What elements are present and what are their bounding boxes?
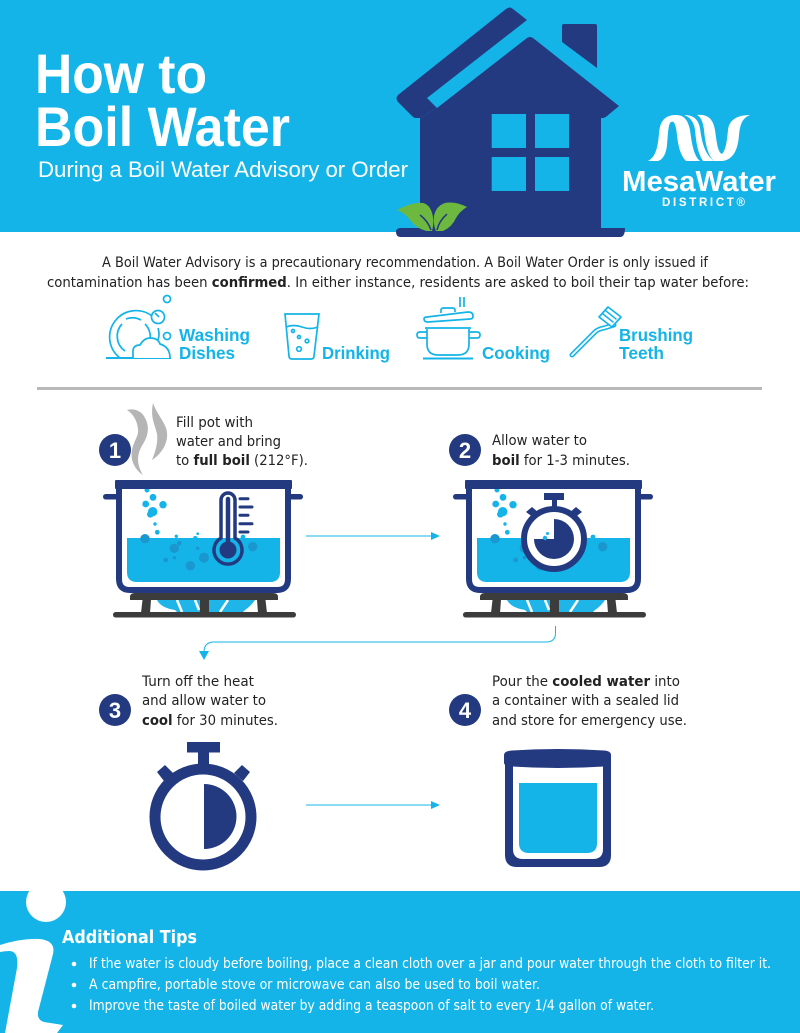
icon: cooking pot bbox=[417, 297, 480, 358]
icon: pot on burner with thermometer bbox=[103, 480, 303, 618]
icon: glass of water bbox=[285, 314, 319, 359]
cooking: Cooking bbox=[482, 343, 550, 363]
logo: Mesa Water District: MesaWater bbox=[622, 166, 776, 198]
logo: Mesa Water District bbox=[622, 115, 776, 209]
step 1 text: water and bring bbox=[176, 434, 281, 450]
step number 4 bbox=[449, 694, 481, 726]
step 3 text: and allow water to bbox=[142, 693, 266, 709]
icon: pot on burner with stopwatch bbox=[453, 480, 653, 618]
arrow: step 3 to 4 bbox=[306, 801, 440, 809]
tips list: A campfire, portable stove or microwave can also be used to boil water. bbox=[89, 977, 540, 993]
intro paragraph bbox=[47, 255, 749, 291]
icon: stopwatch bbox=[524, 493, 584, 569]
step number 1 bbox=[99, 434, 131, 466]
washing dishes bbox=[106, 296, 250, 363]
step 1 text bbox=[176, 415, 308, 469]
drinking: Drinking bbox=[322, 343, 390, 363]
step 2 text: boil for 1-3 minutes. bbox=[492, 453, 630, 469]
intro paragraph: contamination has been confirmed. In either instance, residents are asked to boil their tap water before: bbox=[47, 275, 749, 291]
panel: additional tips bbox=[0, 882, 800, 1033]
step 3 text bbox=[141, 674, 278, 729]
icon: info letter i bbox=[0, 882, 66, 1033]
washing dishes: Washing bbox=[179, 325, 250, 345]
cooking bbox=[417, 297, 550, 363]
step 2 text: Allow water to bbox=[492, 433, 587, 449]
icon: house bbox=[396, 8, 625, 237]
step 1 text: to full boil (212°F). bbox=[176, 453, 308, 469]
washing dishes: Dishes bbox=[179, 343, 235, 363]
header band bbox=[0, 0, 800, 237]
step 3 text: Turn off the heat bbox=[141, 674, 254, 690]
title bbox=[35, 42, 290, 158]
step 4 bbox=[449, 674, 687, 867]
icon: large stopwatch bbox=[155, 742, 251, 865]
arrow: step 2 to 3 bbox=[199, 626, 556, 660]
logo mark bbox=[648, 115, 750, 161]
step 3 bbox=[99, 674, 278, 865]
step 4 text: Pour the cooled water into bbox=[492, 674, 680, 690]
step 4 text: a container with a sealed lid bbox=[492, 693, 679, 709]
icon: leaves bbox=[397, 202, 467, 231]
intro paragraph: A Boil Water Advisory is a precautionary recommendation. A Boil Water Order is only issued if bbox=[102, 255, 709, 271]
step number 2 bbox=[449, 434, 481, 466]
arrow: step 1 to 2 bbox=[306, 532, 440, 540]
tips heading: Additional Tips bbox=[62, 928, 197, 948]
step number 3: 3 bbox=[109, 698, 121, 723]
icon: thermometer bbox=[214, 493, 252, 564]
logo: Mesa Water District: DISTRICT® bbox=[662, 197, 746, 209]
icon: steam bbox=[127, 403, 167, 475]
tips list: Improve the taste of boiled water by adding a teaspoon of salt to every 1/4 gallon of water. bbox=[89, 998, 654, 1014]
drinking bbox=[285, 314, 390, 363]
title: Boil Water bbox=[35, 95, 290, 158]
icon row: uses of boiled water bbox=[106, 296, 693, 363]
step 1 bbox=[99, 403, 308, 618]
subtitle: During a Boil Water Advisory or Order bbox=[38, 157, 408, 182]
step number 1: 1 bbox=[109, 438, 121, 463]
step number 4: 4 bbox=[459, 698, 472, 723]
step 2 bbox=[449, 433, 653, 618]
title: How to bbox=[35, 42, 207, 105]
icon: dishes bbox=[106, 296, 171, 358]
step 3 text: cool for 30 minutes. bbox=[142, 713, 278, 729]
brushing teeth: Brushing bbox=[619, 325, 693, 345]
icon: toothbrush bbox=[572, 307, 621, 355]
brushing teeth bbox=[572, 307, 693, 363]
step number 2: 2 bbox=[459, 438, 471, 463]
tips list bbox=[72, 956, 771, 1014]
icon: sealed jar bbox=[504, 749, 611, 867]
step 4 text bbox=[492, 674, 687, 729]
step 1 text: Fill pot with bbox=[176, 415, 253, 431]
brushing teeth: Teeth bbox=[619, 343, 664, 363]
step 4 text: and store for emergency use. bbox=[492, 713, 687, 729]
step 2 text bbox=[492, 433, 630, 469]
step number 3 bbox=[99, 694, 131, 726]
